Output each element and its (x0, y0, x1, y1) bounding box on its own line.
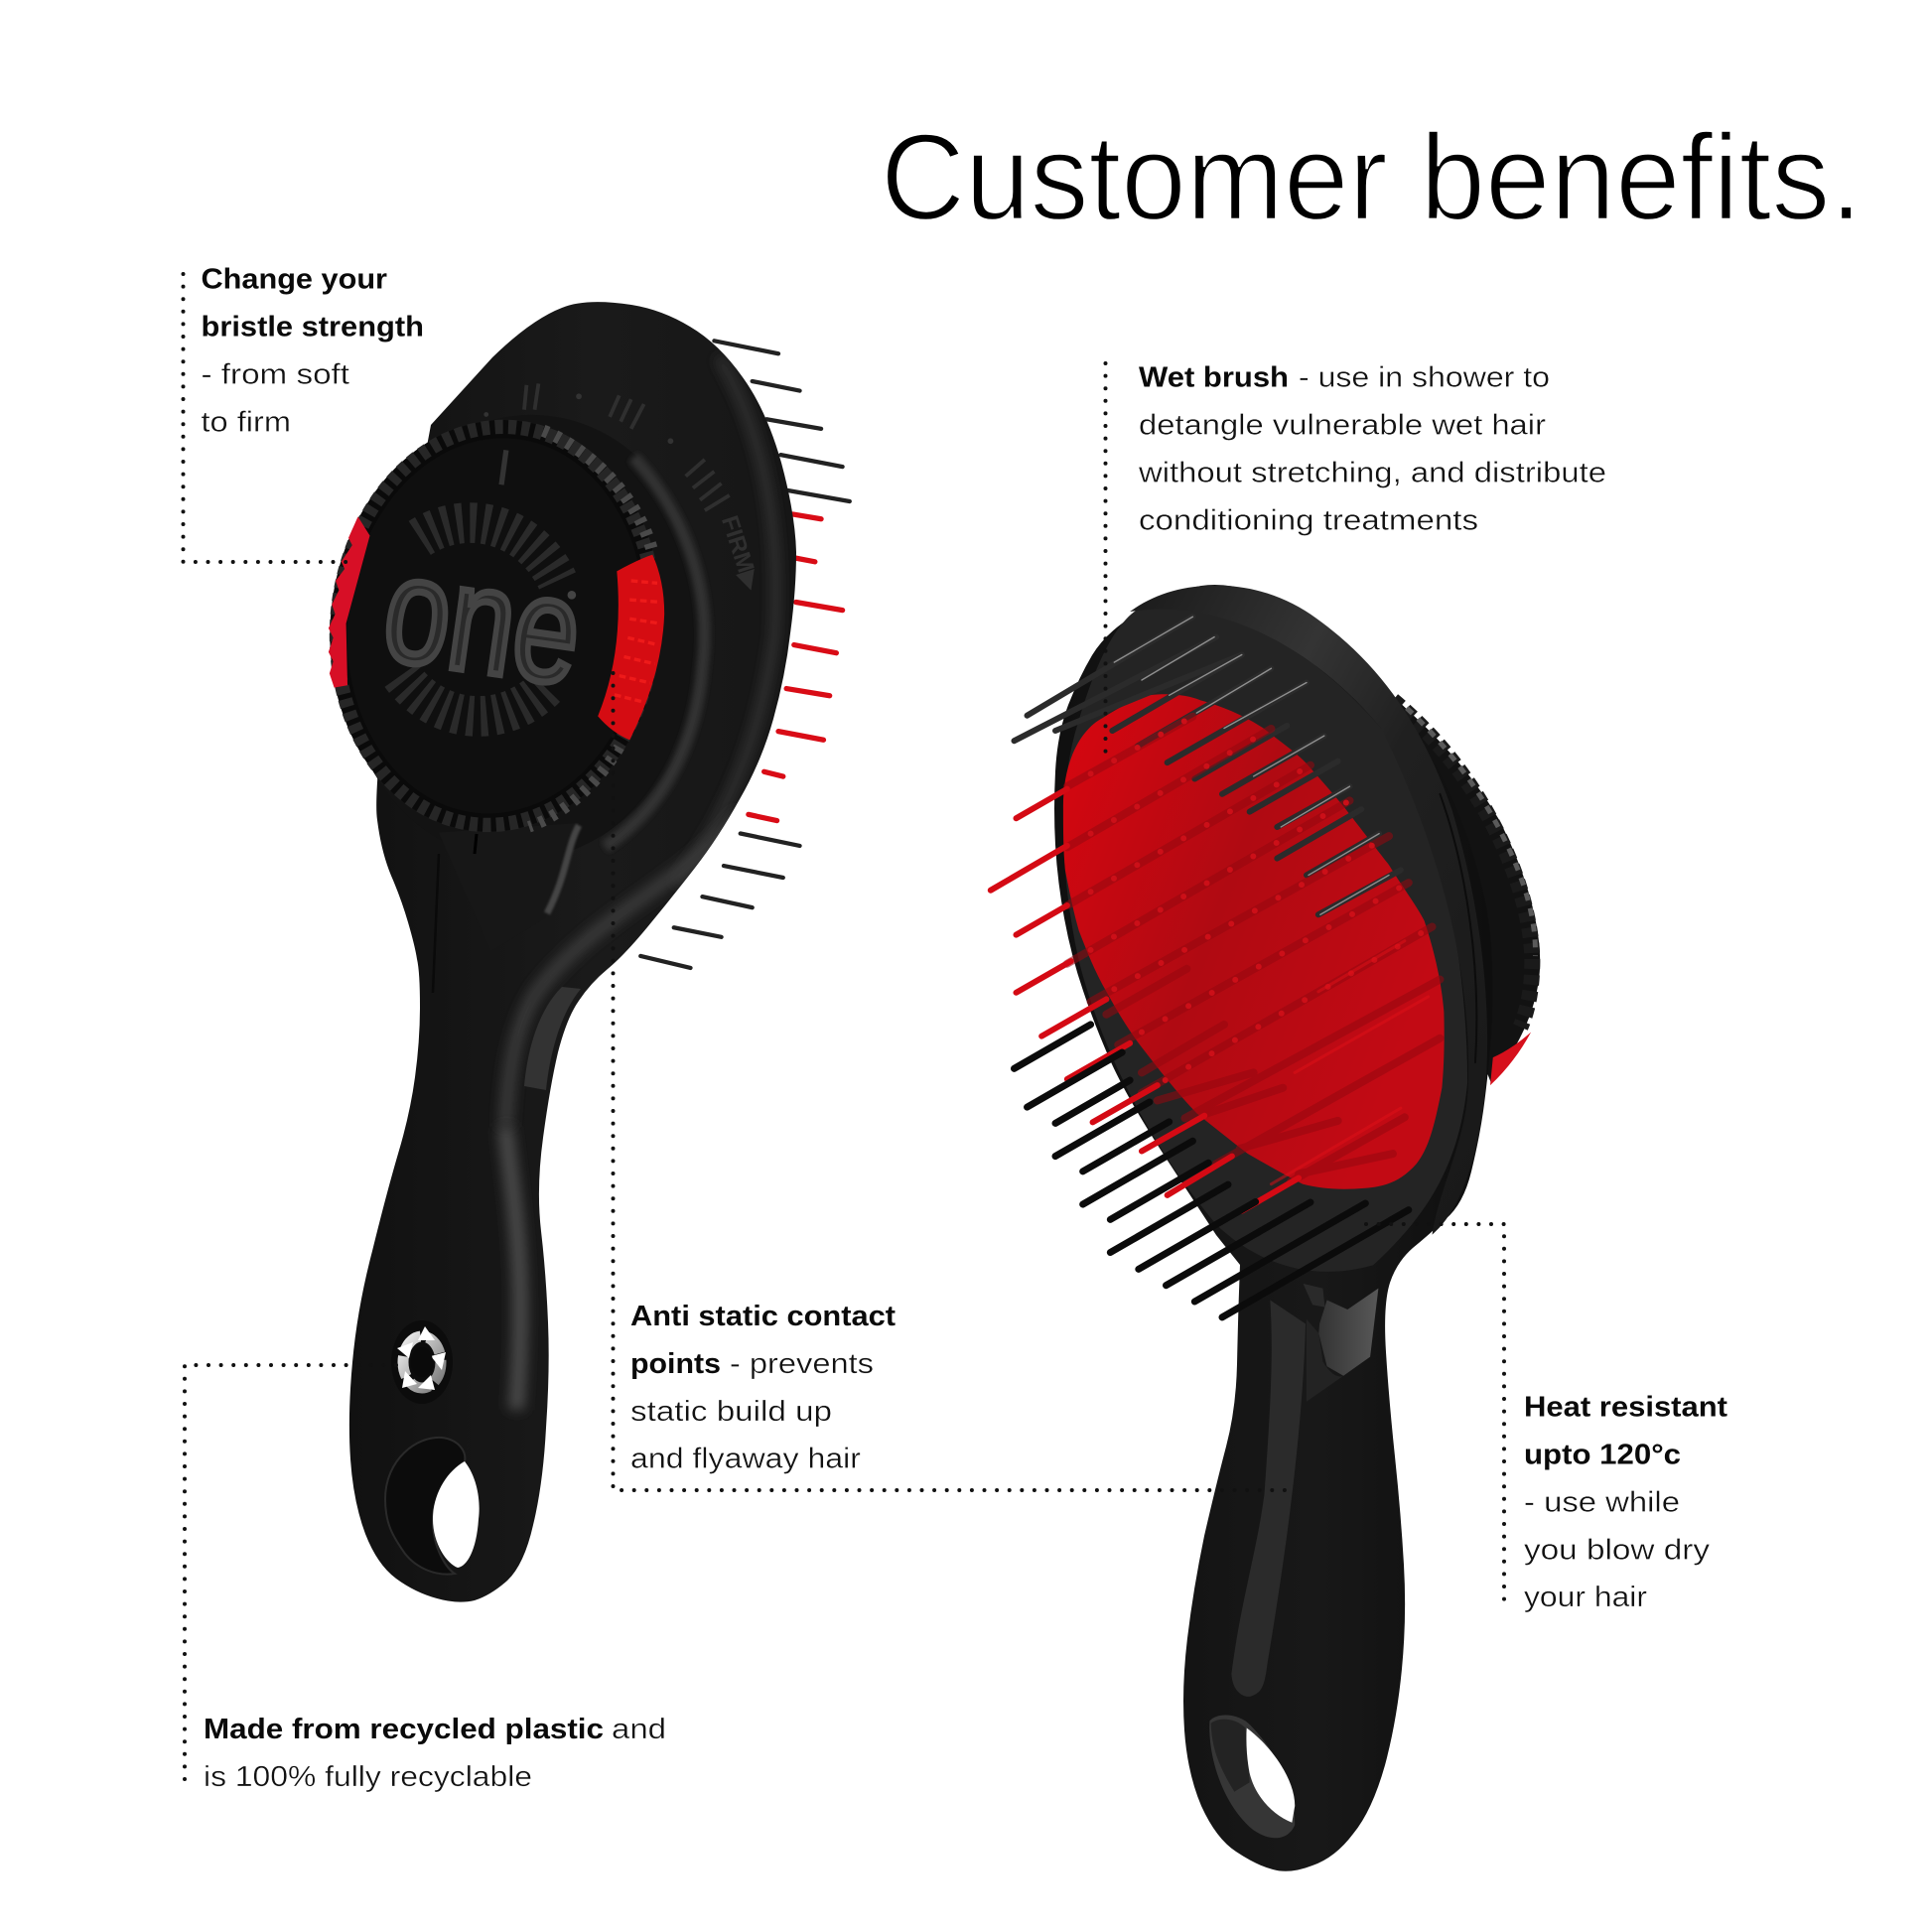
gray top bristles (1015, 617, 1401, 914)
firmness marks: FIRM▶ (716, 512, 765, 595)
left brush bristles (640, 341, 850, 968)
callout: anti static: static build up (630, 1396, 832, 1428)
left brush (310, 302, 850, 1602)
handle side panel (524, 987, 581, 1090)
callout: bristle strength (183, 264, 424, 562)
callout: heat resistant: upto 120°c (1524, 1440, 1681, 1471)
title: Customer benefits. (881, 110, 1863, 246)
callout: heat resistant: - use while (1524, 1487, 1680, 1519)
lock notch (475, 834, 477, 854)
callout: bristle strength: - from soft (201, 359, 349, 391)
callout: bristle strength: bristle strength (201, 312, 424, 344)
callout: recycled plastic: Made from recycled plastic (204, 1714, 604, 1745)
callout: wet brush (1106, 361, 1606, 756)
callout: wet brush: Wet brush (1139, 361, 1289, 393)
red oval (1063, 694, 1445, 1189)
right brush body and handle (1054, 585, 1493, 1871)
left red grip (329, 516, 370, 688)
dial tick ring (398, 523, 558, 717)
left brush shading (433, 357, 775, 1410)
right dial knurl (1389, 693, 1540, 1085)
hub raised disc (319, 383, 765, 951)
right brush plate, rim and bristles (991, 586, 1487, 1317)
recycle badge (391, 1320, 453, 1404)
callout: bristle strength: to firm (201, 407, 291, 439)
callout: anti static: - prevents (730, 1348, 874, 1380)
one logo: one (375, 524, 591, 716)
neck cut-out (1307, 1319, 1343, 1402)
handle groove (1231, 1301, 1306, 1697)
callout: heat resistant (1366, 1224, 1728, 1613)
gray neck block (1318, 1289, 1378, 1376)
rim band (1130, 586, 1487, 1235)
callout: anti static: points (630, 1348, 721, 1380)
callout: anti static (614, 673, 1288, 1490)
dial (310, 403, 682, 848)
plate (1063, 607, 1467, 1272)
callout: heat resistant: your hair (1524, 1582, 1648, 1613)
callout: wet brush: without stretching, and distribute (1138, 457, 1606, 488)
left brush body and handle (349, 302, 796, 1602)
callout: wet brush: conditioning treatments (1139, 504, 1478, 536)
callout: recycled plastic: and (612, 1714, 666, 1745)
callout: anti static: and flyaway hair (630, 1444, 862, 1475)
callout: heat resistant: you blow dry (1524, 1535, 1711, 1567)
right handle hole (1209, 1715, 1295, 1838)
callout: anti static: Anti static contact (630, 1301, 897, 1332)
black lower bristles (1015, 1025, 1409, 1317)
callout: recycled plastic: is 100% fully recyclable (204, 1761, 532, 1793)
callout: bristle strength: Change your (201, 264, 387, 296)
right brush (991, 585, 1540, 1871)
right handle details (1209, 1284, 1378, 1838)
callout: recycled plastic (185, 1365, 666, 1793)
callout: wet brush: - use in shower to (1299, 361, 1550, 393)
firmness marks (483, 383, 765, 595)
bristle base dots (1091, 717, 1433, 1080)
red bristles across oval (1067, 717, 1440, 1181)
callout: wet brush: detangle vulnerable wet hair (1139, 409, 1547, 441)
handle hole (385, 1438, 480, 1575)
right red grip (598, 555, 664, 740)
callout: heat resistant: Heat resistant (1524, 1392, 1728, 1424)
red grip sliver (1490, 1033, 1531, 1085)
